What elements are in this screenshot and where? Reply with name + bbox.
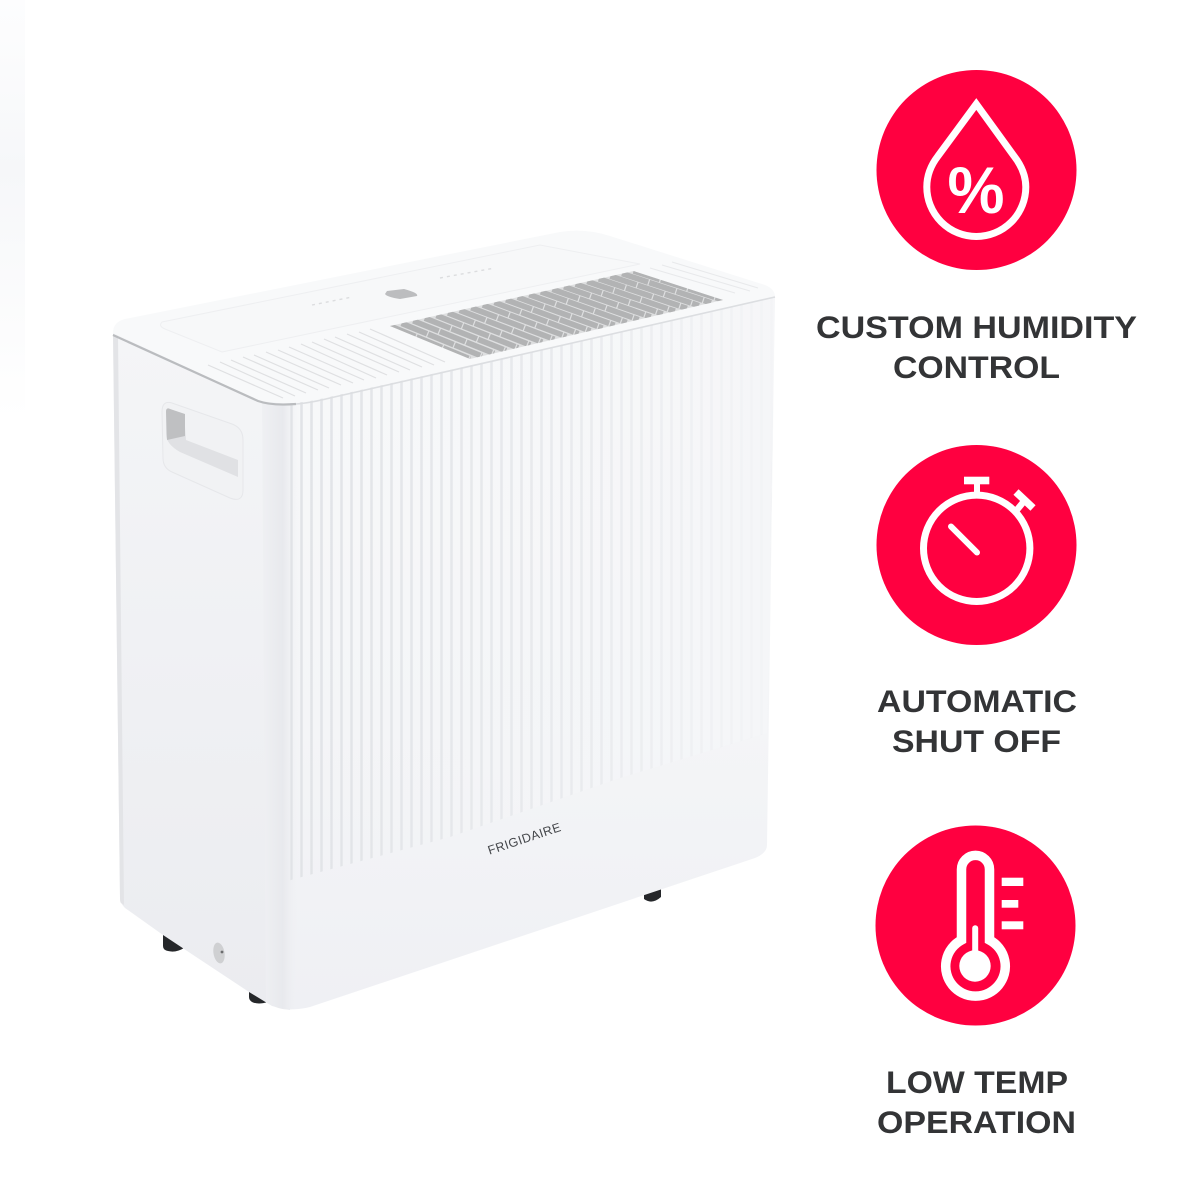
side handle — [162, 402, 243, 499]
rounded front corner — [262, 400, 300, 1010]
front face — [268, 295, 775, 1009]
icon: stopwatch — [876, 445, 1076, 645]
feature: automatic shut off — [876, 445, 1077, 759]
right rim line — [296, 297, 775, 404]
brand logo: FRIGIDAIRE — [486, 820, 563, 858]
label: OPERATION — [877, 1104, 1076, 1140]
product: white Frigidaire humidifier — [113, 231, 776, 1010]
label: CONTROL — [893, 349, 1060, 385]
control buttons — [312, 268, 495, 305]
display — [385, 289, 417, 299]
left side face — [113, 332, 290, 1010]
control panel recess — [161, 245, 640, 352]
left vent lines — [208, 329, 445, 398]
top surface — [113, 231, 775, 403]
left rim line — [113, 335, 296, 405]
icon: humidity drop — [876, 70, 1076, 270]
foot: right — [644, 888, 661, 902]
foot: front left — [163, 932, 184, 952]
label: SHUT OFF — [892, 723, 1061, 759]
right vent lines — [650, 262, 758, 293]
icon: thermometer — [876, 826, 1076, 1026]
drain cap — [212, 942, 226, 964]
feature: low temp operation — [876, 826, 1076, 1140]
label: LOW TEMP — [886, 1064, 1068, 1100]
front ribs — [290, 314, 702, 880]
label: AUTOMATIC — [877, 683, 1077, 719]
grille — [390, 271, 723, 359]
left edge strip — [113, 334, 124, 905]
feature: custom humidity control — [816, 70, 1137, 385]
label: CUSTOM HUMIDITY — [816, 309, 1137, 345]
faint left edge glow — [0, 0, 25, 420]
icon: humidity drop: % — [948, 153, 1004, 227]
foot: front bottom — [249, 989, 268, 1004]
